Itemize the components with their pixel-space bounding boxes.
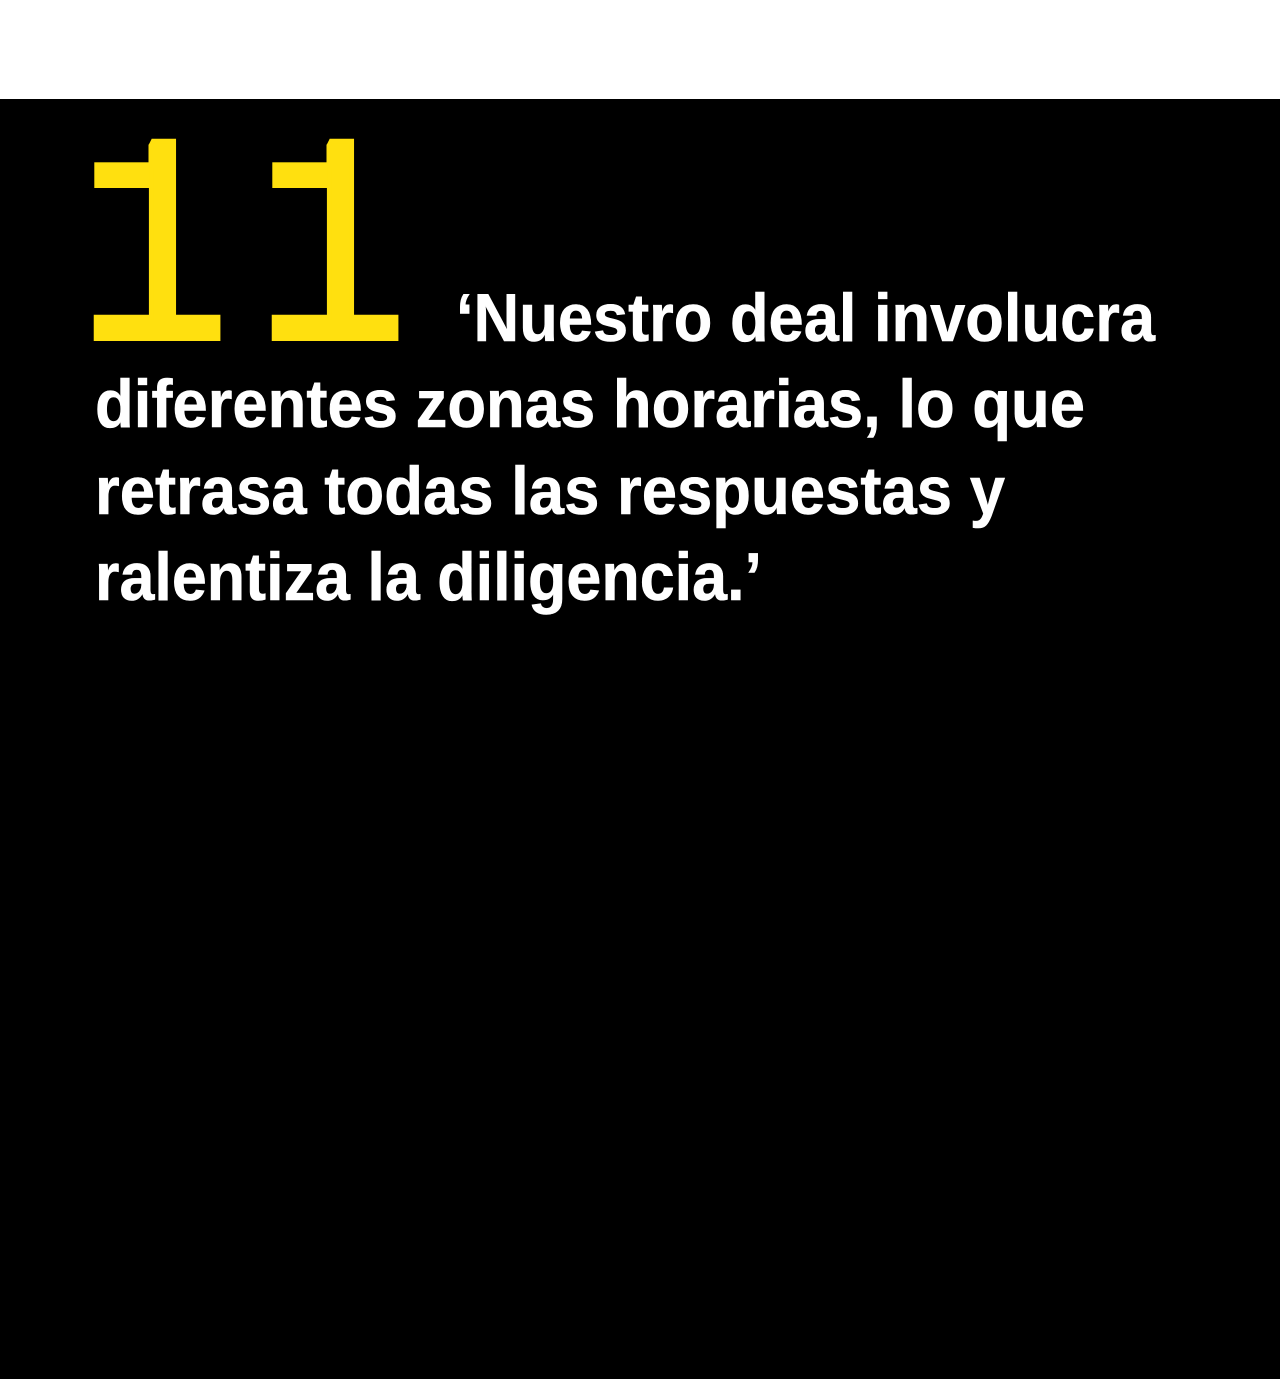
quote text: diferentes zonas horarias, lo que [95, 366, 1085, 442]
quote text: ‘Nuestro deal involucra [456, 280, 1156, 356]
number: 11: 1 [254, 90, 409, 429]
number: 11: 1 [76, 90, 231, 429]
quote text [95, 280, 1156, 615]
number: 11 [76, 90, 409, 429]
quote text: retrasa todas las respuestas y [95, 453, 1005, 529]
quote text: ralentiza la diligencia.’ [95, 539, 762, 615]
